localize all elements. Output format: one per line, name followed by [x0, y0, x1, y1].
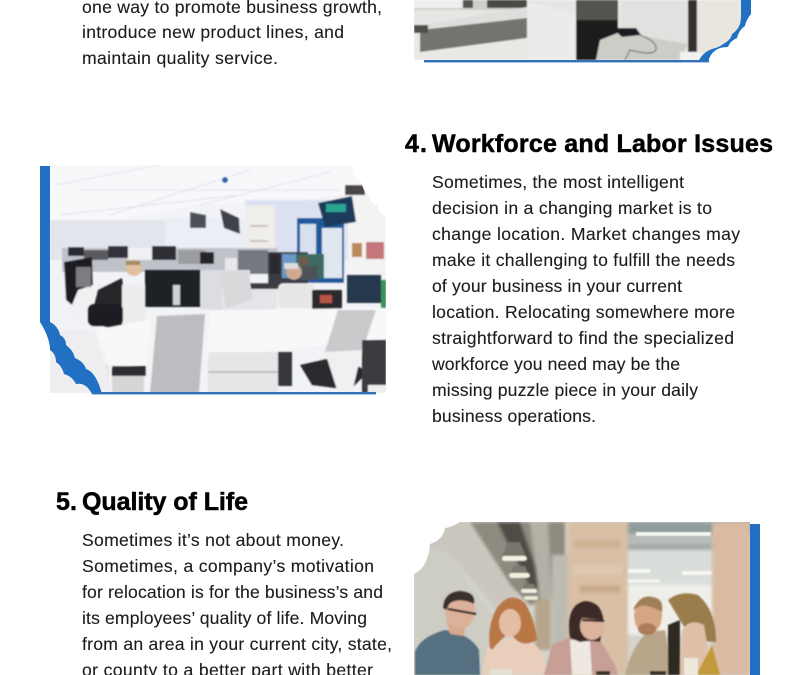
heading: 5. Quality of Life: 5. [56, 488, 77, 516]
foreground desk [95, 308, 386, 368]
text block: section 4 body: of your business in your current [432, 276, 682, 296]
text block: section 4 body: straightforward to find the specialized [432, 328, 734, 348]
blue door [297, 218, 344, 283]
photo: open-plan office (section 4) [40, 165, 386, 394]
photo: team around a table (section 5) [414, 522, 760, 675]
heading: 5. Quality of Life: Quality of Life [82, 488, 248, 516]
ceiling lights [636, 532, 711, 536]
text block: section 5 body: for relocation is for the business’s and [82, 582, 383, 602]
text block: section 4 body: decision in a changing market is to [432, 198, 712, 218]
blue scalloped edge [40, 166, 102, 394]
text block: section 5 body: from an area in your current city, state, [82, 634, 392, 654]
white scalloped corner [414, 522, 460, 574]
text block: section 5 body [82, 530, 392, 675]
ceiling [50, 165, 386, 220]
duct area [460, 522, 565, 605]
drawer unit [208, 352, 278, 393]
text block: section 3 body ending [82, 0, 382, 68]
shelves [245, 205, 275, 248]
white desks mid [70, 285, 130, 325]
person 3: woman with dark hair and pink shirt [544, 635, 618, 675]
text block: section 4 body: workforce you need may be the [431, 354, 680, 374]
hands and objects [490, 669, 512, 675]
text block: section 4 body: missing puzzle piece in your daily [432, 380, 698, 400]
person 1: man in blue sweater [415, 630, 480, 675]
text block: section 3 body ending: maintain quality service. [82, 48, 278, 68]
back rows [62, 248, 277, 272]
man with headset [278, 283, 314, 308]
text block: section 3 body ending: introduce new product lines, and [82, 22, 344, 42]
person 4: bearded man in beige [625, 630, 672, 675]
black monitor [145, 270, 200, 307]
photo: office desks (section 3) [414, 0, 760, 62]
blue side bar [750, 524, 760, 675]
back wall [50, 220, 350, 260]
pendant lamps [502, 542, 538, 600]
blurred foreground person at right [712, 522, 750, 675]
ceiling [625, 522, 750, 534]
right monitor & laptop [347, 275, 381, 303]
person 2: red-haired woman [482, 639, 546, 675]
text block: section 5 body: its employees’ quality of life. Moving [82, 608, 367, 628]
text block: section 4 body: make it challenging to fulfill the needs [432, 250, 735, 270]
text block: section 4 body: change location. Market changes may [432, 224, 740, 244]
white corner behind the scallop [708, 0, 760, 62]
blue scalloped edge [698, 0, 751, 62]
center chair back [223, 283, 252, 308]
person 5: woman with dreadlocks in yellow [668, 593, 716, 642]
heading: 4. Workforce and Labor Issues: 4. [405, 130, 427, 158]
white cut at top-right corner [352, 165, 386, 216]
wall left [414, 550, 498, 675]
text block: section 4 body [431, 172, 740, 426]
foreground chairs [144, 308, 208, 376]
man on phone [94, 277, 124, 328]
brick column [568, 522, 628, 675]
text block: section 4 body: location. Relocating somewhere more [432, 302, 735, 322]
blue lamp [222, 177, 228, 183]
text block: section 4 body: business operations. [432, 406, 596, 426]
text block: section 5 body: Sometimes it’s not about money. [82, 530, 344, 550]
wall screens [190, 212, 206, 228]
text block: section 5 body: Sometimes, a company’s motivation [82, 556, 374, 576]
text block: section 4 body: Sometimes, the most intelligent [432, 172, 684, 192]
heading: 4. Workforce and Labor Issues: Workforce and Labor Issues [432, 130, 773, 158]
